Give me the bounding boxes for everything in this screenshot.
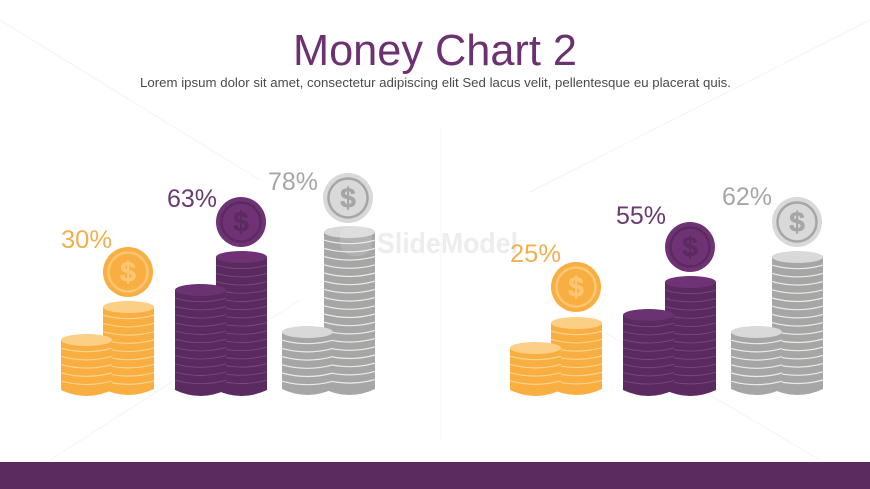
left chart — [61, 168, 375, 396]
purple short stack — [623, 309, 674, 396]
purple tall stack — [665, 276, 716, 396]
purple short stack — [175, 284, 226, 396]
label 25%: 25% — [510, 240, 561, 268]
gray coin: $ — [789, 206, 805, 238]
purple coin: $ — [682, 232, 698, 262]
label 30%: 30% — [61, 226, 112, 254]
orange short stack — [510, 342, 561, 396]
orange tall stack — [551, 317, 602, 395]
label 55%: 55% — [616, 202, 666, 230]
gray tall stack — [772, 251, 823, 395]
orange coin — [551, 262, 601, 312]
purple coin — [665, 222, 715, 272]
label 78%: 78% — [268, 168, 318, 196]
orange tall stack — [103, 301, 154, 395]
purple tall stack — [216, 251, 267, 396]
gray coin — [323, 173, 373, 223]
orange coin: $ — [120, 256, 136, 288]
watermark: SlideModel — [377, 228, 518, 260]
watermark logo mark — [340, 224, 372, 256]
gray coin: $ — [340, 182, 356, 214]
label 63%: 63% — [167, 185, 217, 213]
orange coin — [103, 247, 153, 297]
title: Money Chart 2 — [293, 26, 577, 75]
gray coin — [772, 197, 822, 247]
footer bar — [0, 462, 870, 489]
gray short stack — [282, 326, 333, 395]
gray tall stack — [324, 226, 375, 395]
gray short stack — [731, 326, 782, 395]
label 62%: 62% — [722, 183, 772, 211]
orange short stack — [61, 334, 112, 396]
purple coin — [216, 197, 266, 247]
purple coin: $ — [233, 206, 249, 238]
orange coin: $ — [568, 272, 584, 302]
right chart — [510, 183, 823, 396]
subtitle: Lorem ipsum dolor sit amet, consectetur adipiscing elit Sed lacus velit, pellentesque eu placerat quis. — [140, 75, 731, 90]
